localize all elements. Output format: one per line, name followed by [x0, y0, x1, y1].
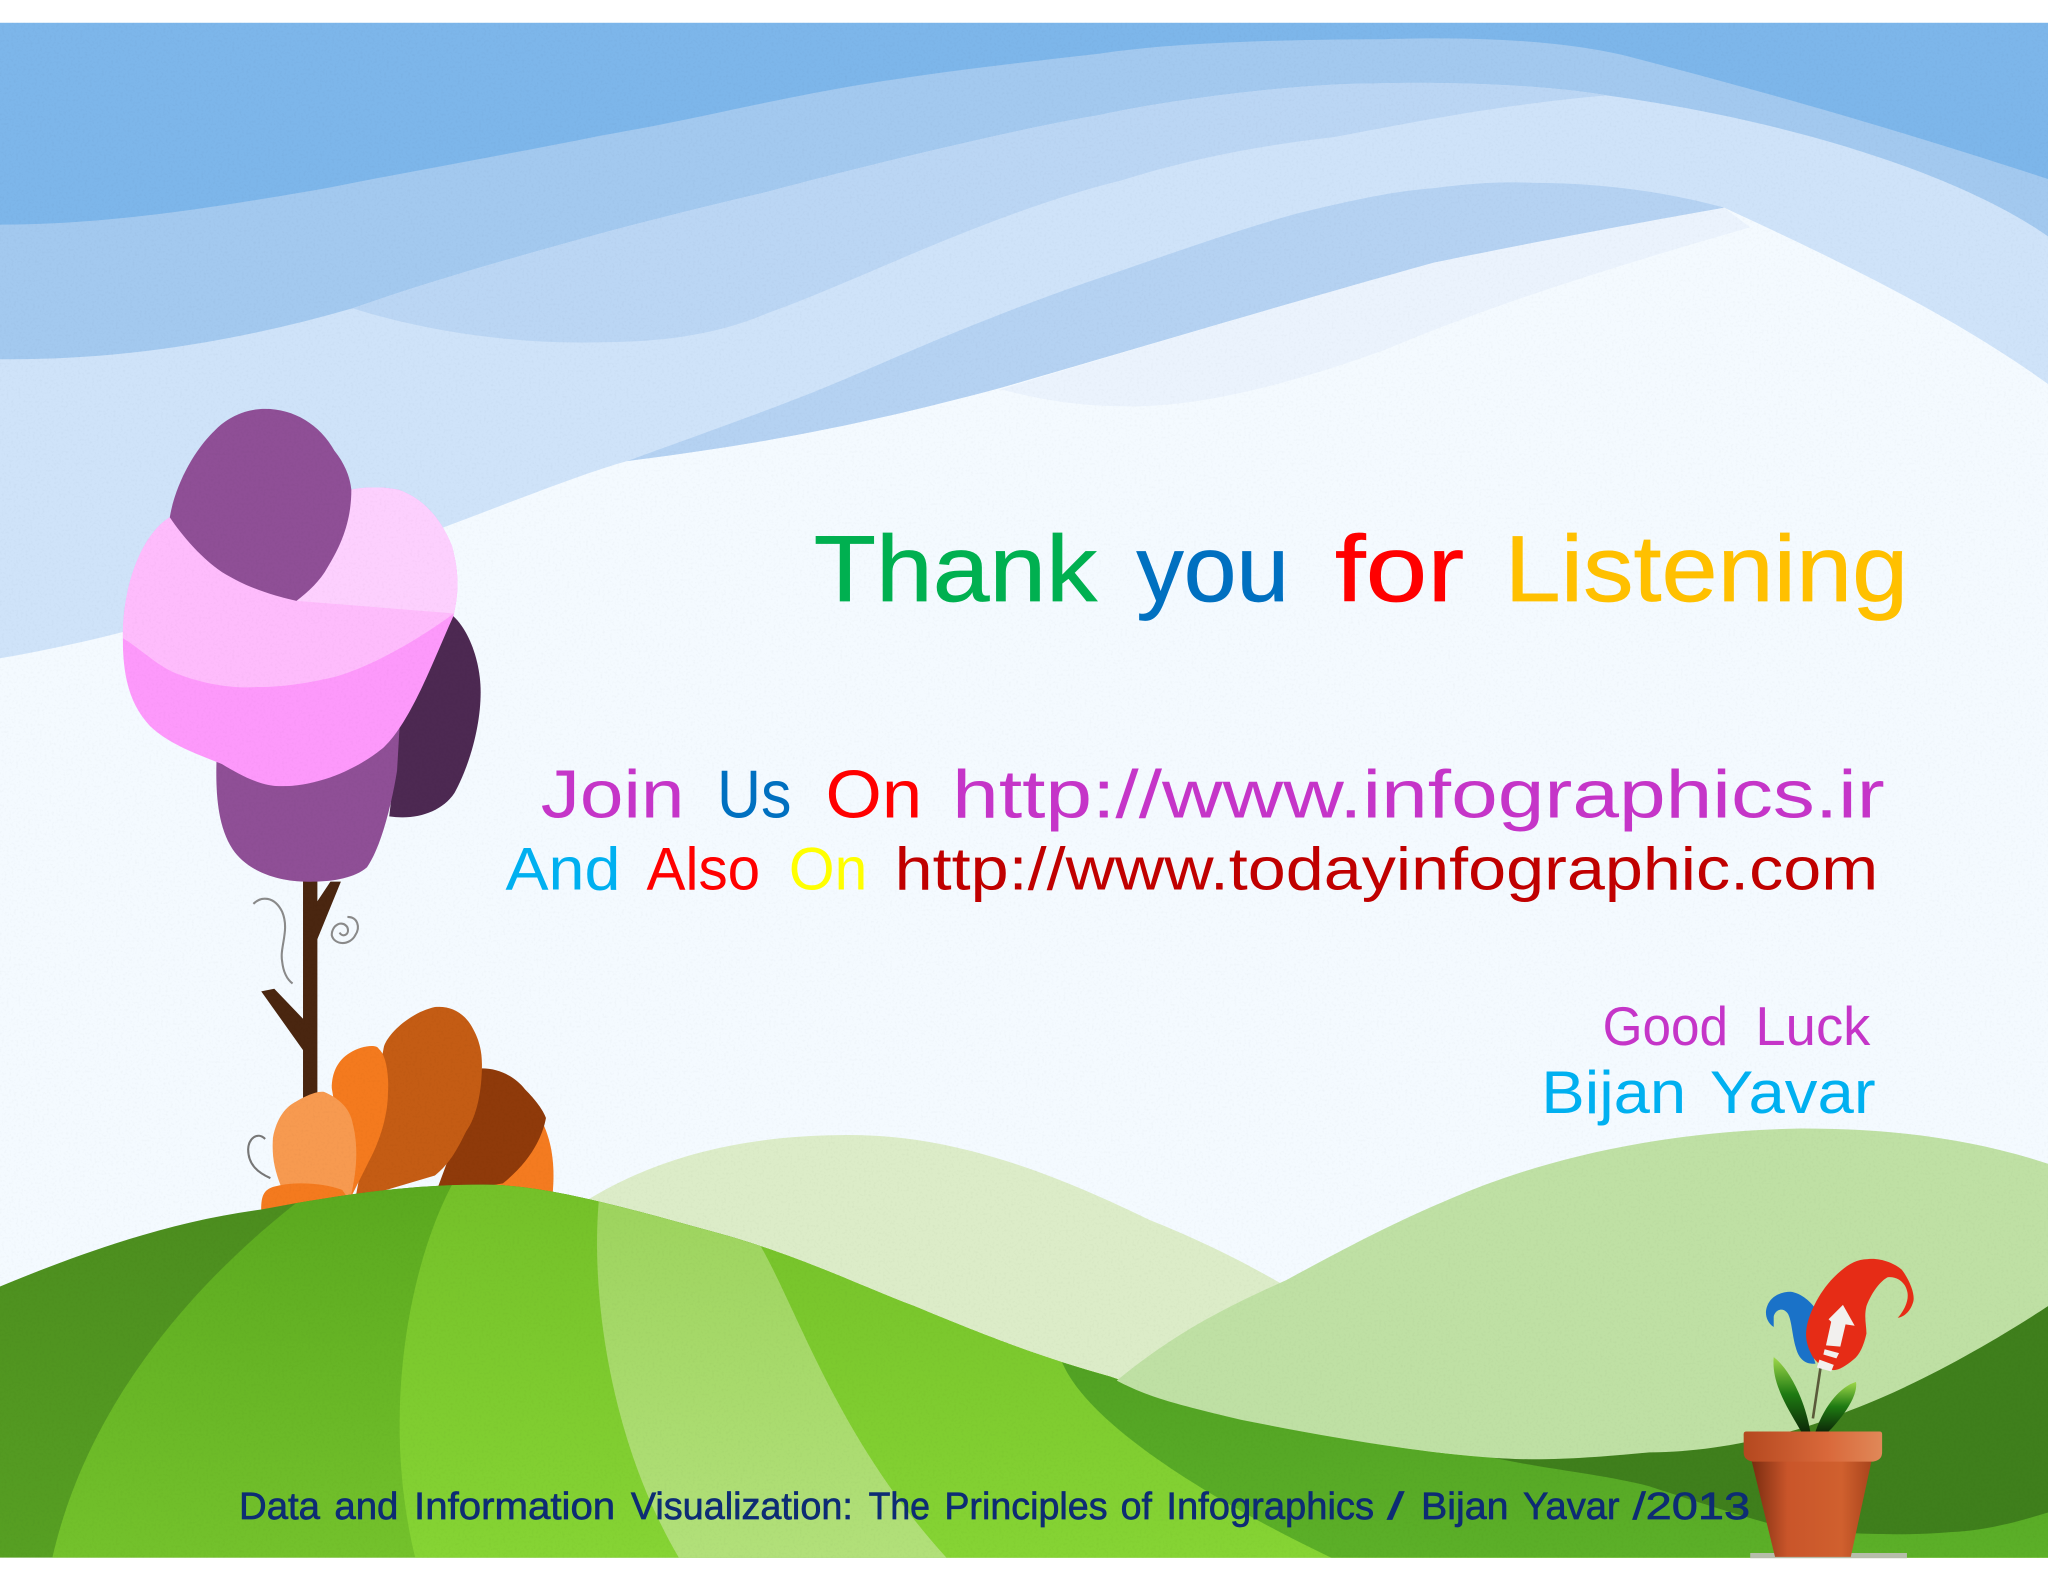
- title: Thank you for Listening: for: [1335, 516, 1464, 621]
- flower stem: [1813, 1366, 1821, 1418]
- text: also on line: And: [505, 835, 620, 902]
- bush: low orange leaf: [261, 1183, 359, 1215]
- bush: orange rear: [483, 1110, 554, 1195]
- text: also on line: Also: [647, 835, 760, 902]
- title: Thank you for Listening: Listening: [1505, 516, 1908, 621]
- pot rim: [1744, 1432, 1882, 1462]
- bush: orange leaf: [332, 1046, 388, 1199]
- curl: beside bush: [248, 1136, 270, 1178]
- wave: inner blue band: [627, 182, 1724, 461]
- bush: dark brown leaf: [435, 1068, 546, 1195]
- text: join us line: http://www.infographics.ir: [952, 758, 1885, 833]
- pink: deep band: [122, 488, 458, 786]
- title: Thank you for Listening: you: [1136, 516, 1289, 621]
- footer citation: Principles: [944, 1486, 1108, 1528]
- flower pot logo: [1744, 1259, 1914, 1558]
- text: also on line: http://www.todayinfographic.com: [895, 835, 1878, 902]
- footer citation: Yavar: [1523, 1486, 1620, 1528]
- curl: right spiral: [332, 917, 358, 943]
- panel: sky with layered waves: [0, 22, 2048, 658]
- title: Thank you for Listening: Thank: [814, 516, 1098, 621]
- wave: light blue lobe: [353, 83, 1607, 343]
- text: join us line: Join: [541, 758, 684, 833]
- curl: left of trunk: [253, 899, 293, 984]
- footer citation: Data: [239, 1486, 321, 1528]
- leaf: left: [1773, 1357, 1810, 1432]
- foliage: pink crown: [122, 488, 458, 786]
- footer citation: The: [869, 1486, 930, 1528]
- footer citation: of: [1121, 1486, 1152, 1528]
- wave: pale lobe: [1000, 208, 1750, 406]
- panel: hills: [0, 1129, 2048, 1561]
- wave: dark blue sky: [0, 22, 2048, 225]
- footer citation: Information: [414, 1486, 615, 1528]
- footer citation: Visualization:: [631, 1486, 853, 1528]
- pot saucer: [1750, 1553, 1907, 1558]
- arrow: white: [1817, 1305, 1855, 1371]
- wave: lightest sky layer: [0, 22, 2048, 658]
- petal: blue: [1766, 1292, 1816, 1364]
- text: join us line: On: [825, 758, 922, 833]
- petal: red: [1806, 1259, 1914, 1370]
- hill: main green with stripes: [0, 1149, 2048, 1561]
- bush: rust leaf: [355, 1007, 482, 1199]
- pink: light top: [296, 488, 458, 614]
- tree trunk: [261, 875, 341, 1100]
- text: also on line: On: [789, 835, 867, 902]
- hill: pale right: [1117, 1129, 2048, 1459]
- text: author name: [1541, 1059, 1876, 1126]
- foliage: lower purple: [216, 725, 400, 882]
- text: author name: Yavar: [1710, 1059, 1876, 1126]
- text: good luck: Luck: [1755, 995, 1871, 1057]
- text: also on line: [505, 835, 1878, 902]
- pot body: [1752, 1460, 1872, 1557]
- bush: [248, 1007, 554, 1215]
- footer citation: [239, 1486, 1750, 1528]
- foliage: top purple: [170, 409, 351, 601]
- footer citation: Infographics: [1166, 1486, 1374, 1528]
- pink: middle band: [122, 518, 454, 688]
- text: join us line: [541, 758, 1885, 833]
- text: good luck: [1603, 995, 1871, 1057]
- footer citation: and: [334, 1486, 398, 1528]
- bush: light orange leaf: [273, 1092, 356, 1199]
- footer citation: /2013: [1633, 1486, 1750, 1528]
- wave: mid blue layer: [0, 22, 2048, 359]
- title: Thank you for Listening: [814, 516, 1908, 621]
- footer citation: /: [1387, 1486, 1405, 1528]
- text: good luck: Good: [1603, 995, 1728, 1057]
- hill: far pale left: [575, 1135, 1287, 1385]
- text: author name: Bijan: [1541, 1059, 1686, 1126]
- tree: [104, 409, 483, 1100]
- leaf: right: [1816, 1382, 1856, 1432]
- footer citation: Bijan: [1421, 1486, 1509, 1528]
- foliage: dark purple back: [389, 614, 481, 817]
- text: join us line: Us: [717, 758, 792, 833]
